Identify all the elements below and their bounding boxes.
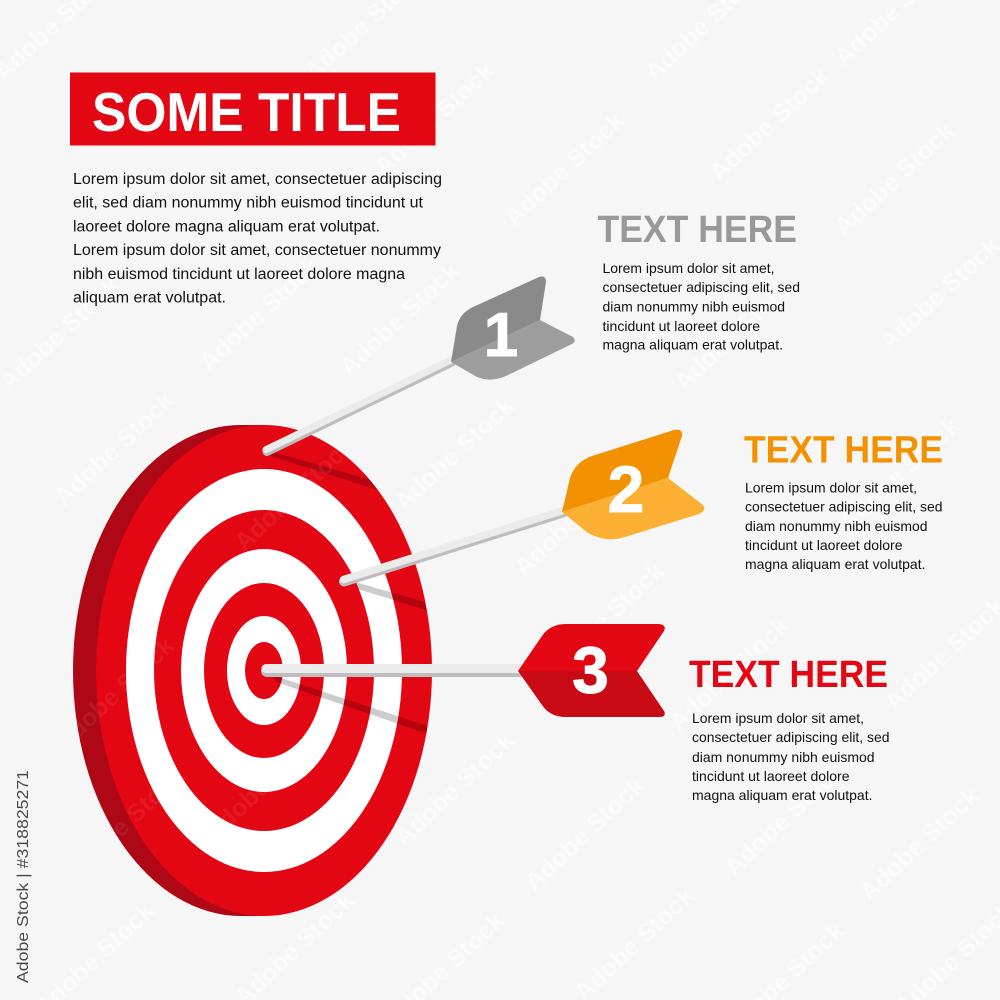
text block 2 <box>744 430 943 572</box>
body 1 <box>602 260 800 352</box>
arrow shadows on target <box>267 452 434 736</box>
body 3: tincidunt ut laoreet dolore <box>692 768 850 784</box>
body 3: Lorem ipsum dolor sit amet, <box>692 710 864 726</box>
arrow 1 lower fin <box>451 320 575 380</box>
watermark: repeated stock text: Adobe Stock <box>509 457 640 581</box>
watermark: repeated stock text: Adobe Stock <box>704 62 835 186</box>
body 1: Lorem ipsum dolor sit amet, <box>602 260 774 276</box>
watermark: repeated stock text: Adobe Stock <box>334 257 465 381</box>
arrow 2 lower fin <box>562 478 704 539</box>
intro text block <box>73 171 442 306</box>
body 3 <box>692 710 890 803</box>
watermark: repeated stock text: Adobe Stock <box>669 272 800 396</box>
arrow 3 lower fin <box>518 671 665 717</box>
heading 3: TEXT HERE <box>689 654 888 696</box>
body 2: magna aliquam erat volutpat. <box>745 556 926 572</box>
heading 1: TEXT HERE <box>598 209 797 251</box>
watermark over target: Adobe Stock <box>49 632 180 756</box>
title banner: SOME TITLE <box>92 81 401 143</box>
intro text block: Lorem ipsum dolor sit amet, consectetuer nonummy <box>73 242 441 259</box>
target face rings <box>96 425 432 916</box>
watermark: repeated stock text: Adobe Stock <box>854 782 985 906</box>
intro text block: nibh euismod tincidunt ut laoreet dolore magna <box>73 266 405 283</box>
arrow 1: grey <box>266 277 575 452</box>
arrow 3: red <box>266 624 665 717</box>
arrow 1 upper fin <box>451 277 546 362</box>
intro text block: aliquam erat volutpat. <box>73 290 226 306</box>
target board <box>73 425 434 916</box>
target side edge <box>73 425 409 916</box>
text block 3 <box>689 654 890 803</box>
watermark: repeated stock text: Adobe Stock <box>194 252 325 376</box>
arrow 1 shaft <box>266 360 452 452</box>
watermark: repeated stock text: Adobe Stock <box>829 117 960 241</box>
body 3: magna aliquam erat volutpat. <box>692 787 872 803</box>
intro text block: elit, sed diam nonummy nibh euismod tincidunt ut <box>73 195 424 212</box>
arrow 2 number: 2 <box>608 452 644 526</box>
arrow 3 number: 3 <box>572 633 609 707</box>
watermark: repeated stock text: Adobe Stock <box>369 57 500 181</box>
body 2: Lorem ipsum dolor sit amet, <box>745 480 917 496</box>
watermark: repeated stock text: Adobe Stock <box>49 387 180 511</box>
watermark: repeated stock text: Adobe Stock <box>499 107 630 231</box>
body 1: magna aliquam erat volutpat. <box>602 336 783 352</box>
heading 2: TEXT HERE <box>744 430 943 472</box>
body 3: consectetuer adipiscing elit, sed <box>692 729 890 745</box>
arrow 2: orange <box>344 430 704 582</box>
body 2: diam nonummy nibh euismod <box>745 518 928 534</box>
watermark over target <box>49 432 360 886</box>
watermark: repeated stock text: Adobe Stock <box>539 557 670 681</box>
watermark: repeated stock text: Adobe Stock <box>519 772 650 896</box>
body 2: consectetuer adipiscing elit, sed <box>745 498 942 514</box>
watermark: repeated stock text: Adobe Stock <box>389 727 520 851</box>
arrow 2 shaft <box>344 510 563 582</box>
arrow 3 upper fin <box>518 624 665 671</box>
watermark: repeated stock text: Adobe Stock <box>719 757 850 881</box>
arrow 3 shaft <box>266 668 522 671</box>
stock id vertical label: Adobe Stock | #318825271 <box>15 770 32 983</box>
body 1: diam nonummy nibh euismod <box>602 298 785 314</box>
watermark over target: Adobe Stock <box>59 762 190 886</box>
arrow 1 number: 1 <box>484 301 518 370</box>
body 2 <box>745 480 942 572</box>
body 3: diam nonummy nibh euismod <box>692 749 874 765</box>
watermark over target: Adobe Stock <box>199 722 330 846</box>
body 1: tincidunt ut laoreet dolore <box>602 318 760 334</box>
watermark: repeated stock text: Adobe Stock <box>389 392 520 516</box>
body 1: consectetuer adipiscing elit, sed <box>602 279 800 295</box>
intro text block: laoreet dolore magna aliquam erat volutpat. <box>73 218 380 236</box>
arrow 2 upper fin <box>562 430 682 512</box>
intro text block: Lorem ipsum dolor sit amet, consectetuer adipiscing <box>73 171 442 188</box>
text block 1 <box>598 209 800 352</box>
body 2: tincidunt ut laoreet dolore <box>745 537 903 553</box>
watermark: repeated stock text: Adobe Stock <box>834 412 965 536</box>
watermark over target: Adobe Stock <box>229 432 360 556</box>
watermark: repeated stock text: Adobe Stock <box>664 612 795 736</box>
